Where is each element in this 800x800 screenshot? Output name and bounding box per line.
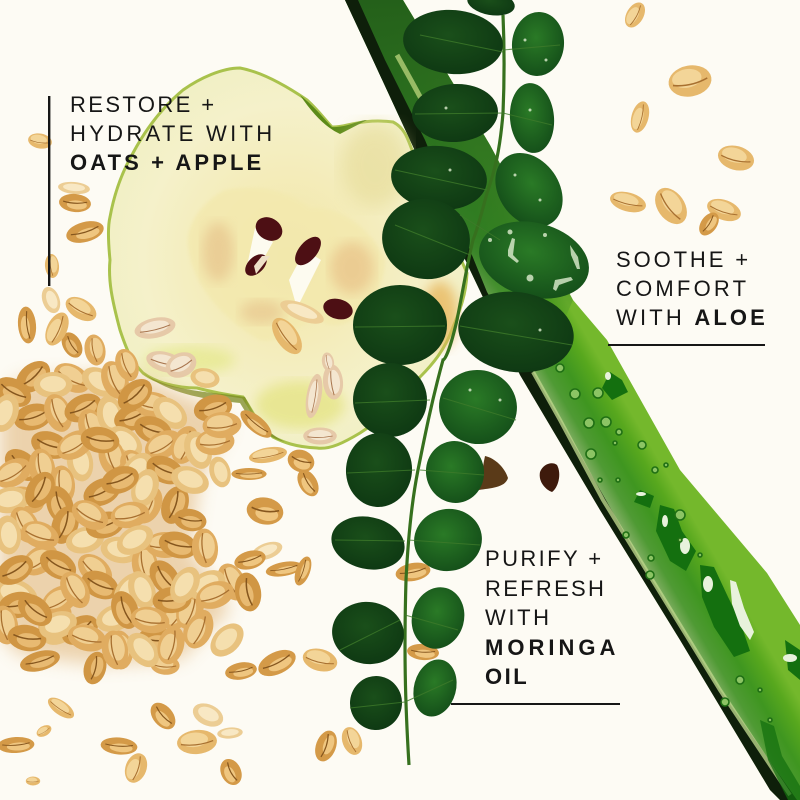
text: restore + hydrate: HYDRATE WITH (70, 121, 275, 146)
text: restore + hydrate: OATS + APPLE (70, 150, 264, 175)
aloe leaf stalk (345, 0, 800, 800)
dark moringa seeds (479, 456, 559, 492)
leaflets (326, 0, 598, 732)
text: purify + refresh (451, 546, 620, 705)
apple core (188, 188, 385, 341)
apple flesh tones (341, 123, 409, 207)
leaf midribs (335, 35, 572, 708)
water droplets (556, 364, 772, 722)
oat pile (0, 329, 264, 687)
aloe water pools (602, 372, 800, 800)
text: soothe + comfort: COMFORT (616, 276, 749, 301)
scattered oats: left column (16, 132, 106, 349)
text: restore + hydrate (48, 92, 275, 286)
text: soothe + comfort: SOOTHE + (616, 247, 751, 272)
text: purify + refresh: REFRESH (485, 576, 606, 601)
scattered oats: upper right (608, 0, 757, 239)
moringa branch (326, 0, 598, 765)
text: purify + refresh: MORINGA (485, 635, 619, 660)
stem (405, 15, 504, 765)
text: purify + refresh: PURIFY + (485, 546, 603, 571)
text: purify + refresh: OIL (485, 664, 529, 689)
text: soothe + comfort: WITH ALOE (616, 305, 768, 330)
seed cavity (247, 228, 321, 308)
text: restore + hydrate: RESTORE + (70, 92, 217, 117)
oats near moringa (394, 560, 440, 661)
text: purify + refresh: WITH (485, 605, 552, 630)
apple seeds (241, 212, 355, 323)
scattered oats: beside apple (231, 406, 323, 588)
scattered oats: bottom (0, 645, 366, 789)
oats on apple (133, 295, 344, 444)
apple slice (108, 68, 467, 448)
text: soothe + comfort (608, 247, 768, 346)
leaf water drops (444, 38, 580, 402)
